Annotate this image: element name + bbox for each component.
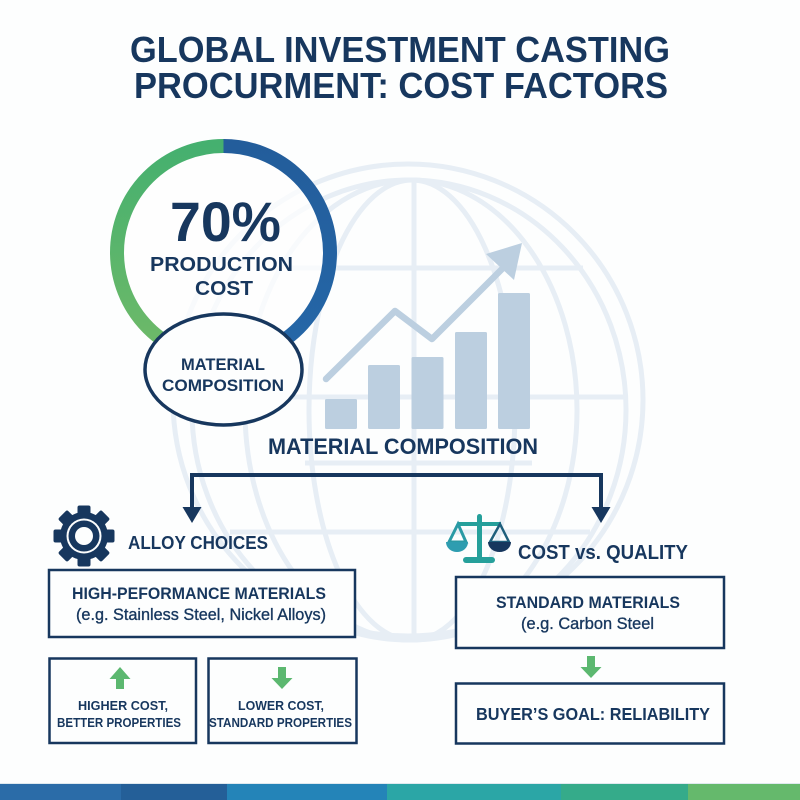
donut chart: 70% production cost: PRODUCTION	[150, 253, 293, 276]
icon: green down arrow	[272, 667, 292, 689]
callout oval: material composition: MATERIAL	[181, 356, 265, 374]
icon: green up arrow	[110, 667, 130, 689]
icon: balance scales	[446, 514, 511, 563]
panel: higher cost	[50, 658, 196, 743]
panel: lower cost	[208, 658, 356, 743]
icon: green down arrow between panels	[580, 656, 602, 678]
donut chart: 70% production cost: 70%	[170, 190, 281, 253]
panel: lower cost: STANDARD PROPERTIES	[209, 716, 352, 730]
panel: standard materials: (e.g. Carbon Steel	[521, 615, 654, 633]
heading: cost vs. quality: COST vs. QUALITY	[518, 542, 689, 564]
branching connector arrows	[182, 475, 610, 523]
background globe	[173, 164, 643, 640]
panel: high-performance materials	[49, 570, 355, 637]
callout oval: material composition	[145, 314, 302, 425]
donut chart: 70% production cost	[117, 146, 330, 359]
panel: standard materials: STANDARD MATERIALS	[496, 594, 680, 612]
heading: material composition: MATERIAL COMPOSITION	[268, 434, 538, 459]
panel: high-performance materials: (e.g. Stainless Steel, Nickel Alloys)	[76, 606, 326, 624]
footer colour band	[0, 783, 800, 800]
callout oval: material composition: COMPOSITION	[162, 377, 284, 395]
title: PROCURMENT: COST FACTORS	[134, 65, 668, 106]
panel: standard materials	[456, 577, 724, 648]
title	[130, 29, 670, 106]
panel: buyer's goal	[456, 684, 724, 744]
panel: high-performance materials: HIGH-PEFORMANCE MATERIALS	[72, 584, 326, 603]
title: GLOBAL INVESTMENT CASTING	[130, 29, 670, 70]
panel: buyer's goal: BUYER’S GOAL: RELIABILITY	[476, 704, 710, 724]
icon: gear	[54, 506, 114, 566]
donut chart: 70% production cost: COST	[195, 277, 253, 300]
panel: higher cost: HIGHER COST,	[78, 699, 168, 713]
panel: higher cost: BETTER PROPERTIES	[57, 716, 181, 730]
bar chart with rising arrow	[325, 243, 530, 429]
panel: lower cost: LOWER COST,	[238, 699, 324, 713]
heading: alloy choices: ALLOY CHOICES	[128, 533, 268, 553]
